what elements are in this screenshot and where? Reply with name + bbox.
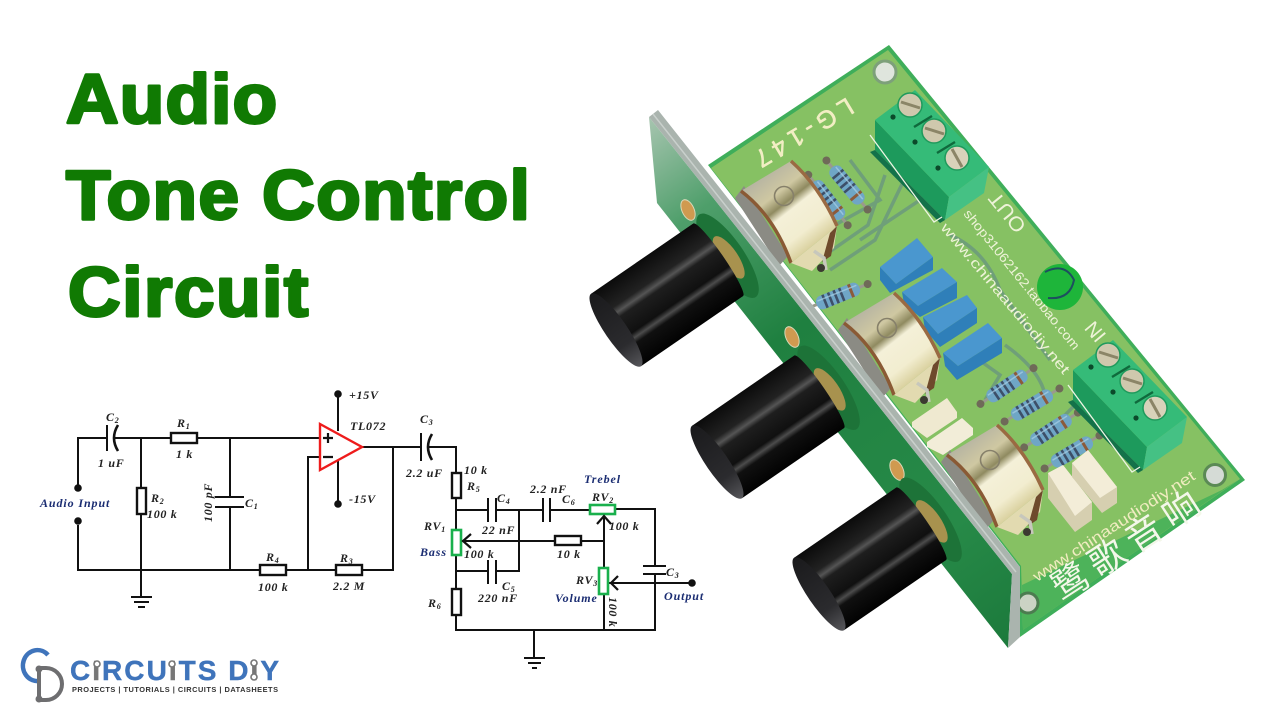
schematic labels right: 1 <box>441 525 446 534</box>
schematic labels right <box>405 412 704 628</box>
potentiometer 2 <box>838 293 940 404</box>
blue capacitors <box>880 238 1002 380</box>
schematic labels right: 3 <box>428 418 433 427</box>
resistor R5 <box>452 473 461 498</box>
schematic labels left: 1 k <box>176 447 193 461</box>
logo: Circuits DIY <box>23 650 279 702</box>
logo mark <box>23 650 62 702</box>
schematic labels right: Volume <box>555 591 598 605</box>
schematic labels left: 1 uF <box>98 456 124 470</box>
capacitor C1 <box>216 497 243 507</box>
cream film capacitors <box>912 398 1117 532</box>
PCB silkscreen text: www.chinaaudiodiy.net <box>937 219 1073 377</box>
capacitor C2 <box>107 425 118 451</box>
schematic labels right: 100 k <box>609 519 640 533</box>
PCB silkscreen text: OUT <box>985 187 1031 237</box>
PCB silkscreen text: IN <box>1081 316 1111 346</box>
schematic labels right: RV <box>592 490 609 504</box>
schematic labels right: 2.2 nF <box>529 482 567 496</box>
knob 1 <box>580 205 769 379</box>
schematic labels right: 2.2 uF <box>405 466 443 480</box>
front panel <box>649 110 1020 648</box>
logo probe dots <box>94 660 257 680</box>
schematic labels right: 2 <box>608 496 614 505</box>
schematic labels right: 3 <box>674 571 679 580</box>
knob 2 <box>681 337 870 511</box>
output terminal <box>688 579 696 587</box>
schematic labels right: 3 <box>592 579 598 588</box>
schematic labels left: 3 <box>348 557 353 566</box>
photo: tone control PCB module <box>580 45 1245 648</box>
schematic labels right: 6 <box>437 602 441 611</box>
schematic labels left: C <box>245 496 254 510</box>
schematic labels right: RV <box>576 573 593 587</box>
ground symbol right <box>525 658 544 668</box>
terminal block OUT <box>870 90 989 223</box>
resistor R3 <box>336 565 362 575</box>
schematic labels left: TL072 <box>350 419 386 433</box>
ground symbol left <box>132 570 151 607</box>
title: Tone Control <box>66 156 530 235</box>
terminal block IN <box>1068 340 1187 473</box>
schematic labels left: -15V <box>349 492 376 506</box>
schematic labels left: C <box>106 410 115 424</box>
capacitor C3 <box>421 434 432 460</box>
capacitors C4 C5 C6 and output C3 <box>488 499 665 583</box>
schematic labels left: 4 <box>274 556 279 565</box>
schematic labels right: Output <box>664 589 704 603</box>
resistor R2 <box>137 488 146 514</box>
schematic labels left: R <box>266 550 275 564</box>
schematic labels right: 4 <box>505 497 510 506</box>
schematic labels right: Trebel <box>584 472 621 486</box>
schematic labels left: +15V <box>349 388 379 402</box>
schematic: tone stack <box>405 412 704 668</box>
schematic labels right: 6 <box>571 498 575 507</box>
schematic labels right: C <box>420 412 429 426</box>
potentiometer 3 <box>941 425 1043 536</box>
schematic labels left: 1 <box>254 502 258 511</box>
potentiometer RV3 Volume <box>599 568 618 594</box>
schematic labels right: R <box>428 596 437 610</box>
LED sticker <box>1037 264 1083 310</box>
resistor 10k <box>555 536 581 545</box>
potentiometer RV2 Trebel <box>590 505 615 524</box>
schematic labels right: R <box>467 479 476 493</box>
schematic labels right: 22 nF <box>481 523 515 537</box>
schematic labels right: 100 k <box>606 597 620 628</box>
potentiometer RV1 Bass <box>452 530 471 555</box>
potentiometer 1 <box>735 161 837 272</box>
PCB board <box>708 45 1245 637</box>
schematic labels left <box>39 388 386 594</box>
schematic labels right: RV <box>424 519 441 533</box>
schematic labels left: Audio Input <box>39 496 110 510</box>
title: Audio <box>66 60 277 139</box>
knob 3 <box>783 469 972 643</box>
schematic labels left: 100 pF <box>201 483 215 522</box>
PCB silkscreen text: LG-147 <box>750 92 858 173</box>
schematic labels right: Bass <box>419 545 447 559</box>
schematic labels left: R <box>151 491 160 505</box>
schematic labels right: C <box>497 491 506 505</box>
resistor R1 <box>171 433 197 443</box>
schematic labels left: 100 k <box>147 507 178 521</box>
logo tagline: PROJECTS | TUTORIALS | CIRCUITS | DATASHEETS <box>72 685 278 694</box>
schematic labels left: R <box>177 416 186 430</box>
schematic labels right: 5 <box>511 585 515 594</box>
schematic labels right: 100 k <box>464 547 494 561</box>
schematic labels right: C <box>562 492 571 506</box>
resistor R6 <box>452 589 461 615</box>
schematic labels left: 1 <box>186 422 190 431</box>
PCB silkscreen text: 鹭歌音响 <box>1044 483 1207 609</box>
logo wordmark: CIRCUITS DIY <box>70 655 279 686</box>
PCB silkscreen text <box>750 92 1207 609</box>
schematic labels right: 10 k <box>464 463 488 477</box>
schematic labels right: C <box>666 565 675 579</box>
title <box>66 60 530 332</box>
op-amp TL072 <box>320 424 362 470</box>
schematic labels left: 2 <box>159 497 164 506</box>
resistor R4 <box>260 565 286 575</box>
schematic labels left: 2.2 M <box>332 579 365 593</box>
PCB silkscreen text: shop31062162.taobao.com <box>961 206 1083 353</box>
schematic labels right: 5 <box>476 485 480 494</box>
schematic labels left: 100 k <box>258 580 288 594</box>
PCB silkscreen text: www.chinaaudiodiy.net <box>1029 467 1199 586</box>
schematic labels right: C <box>502 579 511 593</box>
schematic labels right: 220 nF <box>477 591 518 605</box>
schematic: input filter and op-amp stage <box>39 388 421 607</box>
resistors <box>800 153 1106 477</box>
terminals <box>74 390 342 525</box>
schematic labels left: R <box>340 551 349 565</box>
title: Circuit <box>68 253 308 332</box>
schematic labels left: 2 <box>114 416 119 425</box>
schematic labels right: 10 k <box>557 547 581 561</box>
